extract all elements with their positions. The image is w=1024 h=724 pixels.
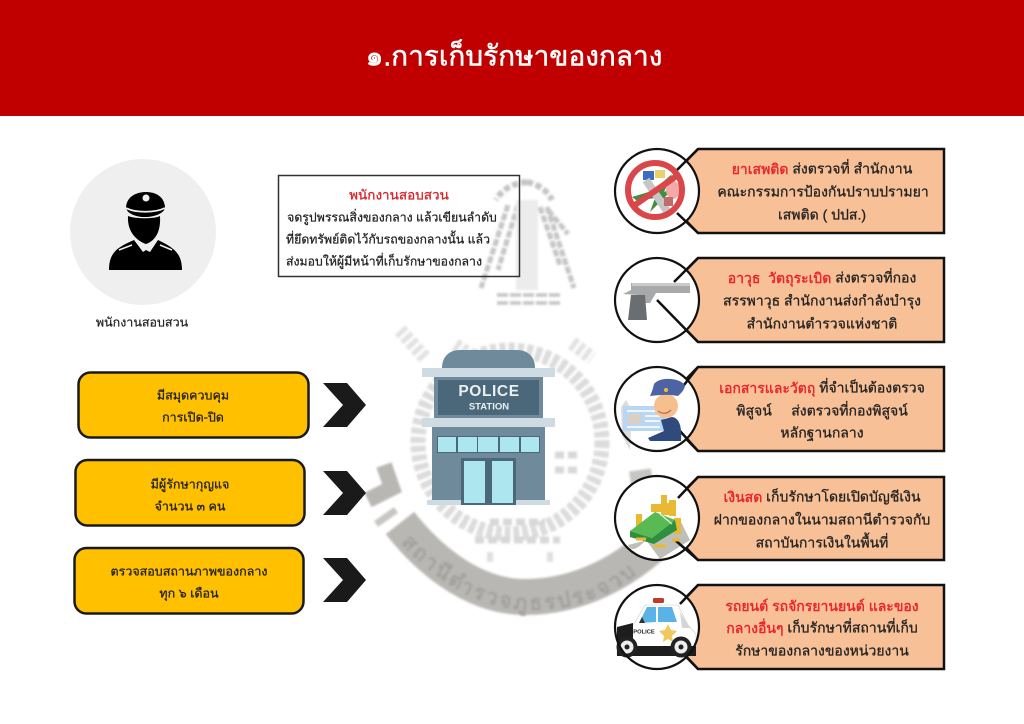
panel: investigator duties — [278, 176, 520, 276]
panel: key keepers box — [76, 460, 304, 526]
weapons text: สรรพาวุธ สำนักงานส่งกำลังบำรุง — [723, 293, 921, 310]
vehicles text: รักษาของกลางของหน่วยงาน — [735, 643, 909, 659]
cash text: ฝากของกลางในนามสถานีตำรวจกับ — [714, 512, 930, 528]
weapons text: สำนักงานตำรวจแห่งชาติ — [747, 316, 897, 332]
icon: prohibited drugs — [615, 149, 699, 233]
panel: register box: การเปิด-ปิด — [162, 410, 224, 424]
weapons text: อาวุธ วัตถุระเบิด ส่งตรวจที่กอง — [728, 269, 916, 287]
vehicles text — [725, 598, 919, 659]
panel: key keepers box: มีผู้รักษากุญแจ — [151, 477, 229, 492]
cash text: สถาบันการเงินในพื้นที่ — [756, 533, 888, 551]
narcotics text — [717, 160, 929, 223]
icon: police station: STATION — [469, 402, 509, 413]
panel: register box — [78, 372, 308, 438]
narcotics text: คณะกรรมการป้องกันปราบปรามยา — [717, 184, 929, 200]
documents text — [719, 379, 925, 442]
icon: money — [615, 476, 699, 560]
vehicles text: รถยนต์ รถจักรยานยนต์ และของ — [725, 598, 919, 614]
title: ๑.การเก็บรักษาของกลาง — [366, 38, 662, 71]
panel: narcotics — [615, 149, 944, 233]
narcotics text: ยาเสพติด ส่งตรวจที่ สำนักงาน — [732, 160, 913, 177]
arrow: chevron 2 — [323, 471, 366, 515]
documents text: เอกสารและวัตถุ ที่จำเป็นต้องตรวจ — [719, 379, 925, 397]
documents text: หลักฐานกลาง — [780, 425, 864, 442]
panel: investigator duties: ส่งมอบให้ผู้มีหน้าที่เก็บรักษาของกลาง — [286, 252, 482, 269]
panel: investigator duties: ที่ยึดทรัพย์ติดไว้กับรถของกลางนั้น แล้ว — [286, 230, 490, 246]
panel: cash — [615, 476, 944, 560]
panel: register box: มีสมุดควบคุม — [157, 388, 229, 403]
panel: documents — [615, 367, 944, 451]
header banner — [0, 0, 1024, 116]
vehicles text: กลางอื่นๆ เก็บรักษาที่สถานที่เก็บ — [726, 619, 918, 636]
icon: police car: POLICE — [633, 630, 655, 636]
investigator label: พนักงานสอบสวน — [96, 315, 189, 329]
panel: inspection box: ทุก ๖ เดือน — [159, 586, 219, 601]
weapons text — [723, 269, 921, 332]
cash text — [714, 488, 930, 551]
panel: inspection box: ตรวจสอบสถานภาพของกลาง — [110, 564, 268, 578]
icon: pistol — [615, 258, 699, 342]
arrow: chevron 3 — [323, 558, 366, 602]
panel: key keepers box: จำนวน ๓ คน — [155, 499, 226, 513]
panel: investigator — [70, 159, 216, 329]
watermark: emblem ribbon text: สถานีตำรวจภูธรประจวบ — [402, 536, 636, 617]
arrow: chevron 1 — [323, 383, 366, 427]
icon: officer with document — [615, 367, 699, 451]
documents text: พิสูจน์ ส่งตรวจที่กองพิสูจน์ — [736, 402, 908, 420]
panel: investigator duties: พนักงานสอบสวน — [349, 188, 449, 203]
icon: police station: POLICE — [458, 383, 520, 400]
narcotics text: เสพติด ( ปปส.) — [778, 207, 866, 223]
icon: police station — [422, 350, 555, 505]
panel: vehicles — [615, 585, 944, 669]
icon: police car — [615, 585, 699, 669]
panel: investigator duties: จดรูปพรรณสิ่งของกลาง แล้วเขียนลำดับ — [287, 208, 497, 225]
panel: weapons — [615, 258, 944, 342]
icon: police officer — [109, 192, 182, 270]
cash text: เงินสด เก็บรักษาโดยเปิดบัญชีเงิน — [723, 488, 921, 505]
watermark: police emblem — [368, 182, 668, 597]
panel: inspection box — [74, 548, 304, 614]
